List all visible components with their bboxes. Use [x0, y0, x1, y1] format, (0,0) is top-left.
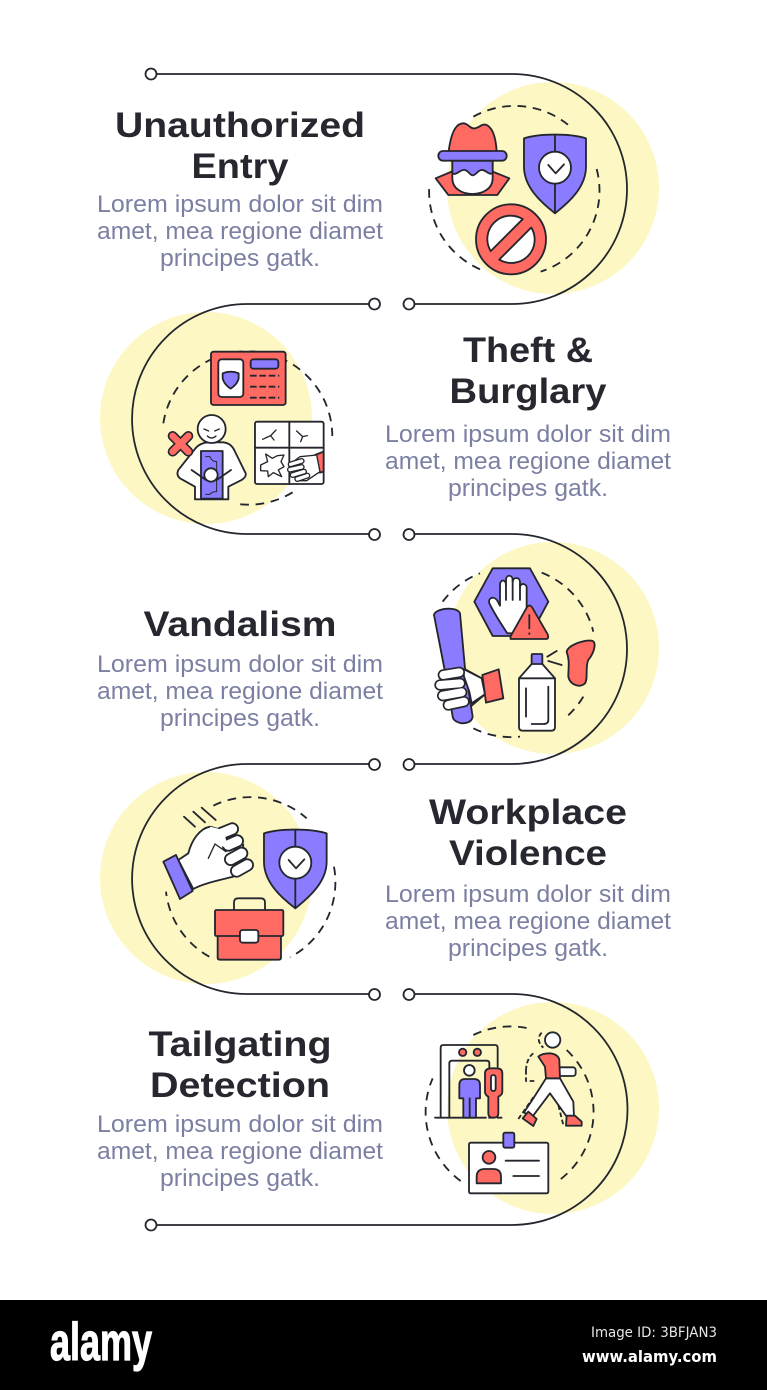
body text: amet, mea regione diamet	[385, 448, 671, 475]
heading: workplace violence: Violence	[449, 834, 607, 873]
alamy logo: alamy	[50, 1313, 152, 1372]
heading: theft and burglary: Theft &	[463, 331, 593, 370]
icon: spy, shield and prohibition sign	[429, 106, 599, 274]
body text	[97, 651, 383, 732]
icon: fist, shield and briefcase	[163, 797, 335, 960]
body text: amet, mea regione diamet	[97, 678, 383, 705]
body text	[385, 421, 671, 502]
panel: theft and burglary text	[385, 331, 671, 502]
panel: unauthorized entry text	[97, 106, 383, 272]
body text: Lorem ipsum dolor sit dim	[385, 421, 671, 448]
body text: Lorem ipsum dolor sit dim	[97, 651, 383, 678]
heading: vandalism: Vandalism	[144, 605, 336, 644]
panel: workplace violence text	[385, 793, 671, 962]
heading: unauthorized entry	[115, 106, 365, 186]
heading: tailgating detection	[148, 1025, 332, 1105]
body text: principes gatk.	[160, 1165, 320, 1192]
body text: principes gatk.	[160, 705, 320, 732]
icon: id card, thief with money and broken window	[163, 351, 332, 505]
heading: theft and burglary	[450, 331, 607, 411]
yellow background circles	[100, 82, 659, 1214]
heading: tailgating detection: Detection	[150, 1066, 330, 1105]
body text	[385, 881, 671, 962]
heading: theft and burglary: Burglary	[450, 372, 607, 411]
connector line with end dots	[132, 68, 627, 1230]
heading: workplace violence: Workplace	[429, 793, 627, 832]
image id: Image ID: 3BFJAN3	[591, 1325, 717, 1341]
footer bar	[0, 1300, 767, 1390]
body text: principes gatk.	[448, 475, 608, 502]
body text: amet, mea regione diamet	[97, 218, 383, 245]
website: www.alamy.com	[582, 1347, 717, 1366]
body text	[97, 1111, 383, 1192]
panel: tailgating detection text	[97, 1025, 383, 1192]
heading: unauthorized entry: Entry	[192, 147, 289, 186]
body text: Lorem ipsum dolor sit dim	[97, 191, 383, 218]
heading: workplace violence	[429, 793, 627, 873]
body text: Lorem ipsum dolor sit dim	[97, 1111, 383, 1138]
body text: amet, mea regione diamet	[385, 908, 671, 935]
icon: stop hand, bat and spray paint	[434, 568, 595, 737]
heading: tailgating detection: Tailgating	[148, 1025, 332, 1064]
body text: principes gatk.	[160, 245, 320, 272]
body text: principes gatk.	[448, 935, 608, 962]
body text: amet, mea regione diamet	[97, 1138, 383, 1165]
icon: metal detector, walking person and id badge	[426, 1026, 594, 1193]
body text: Lorem ipsum dolor sit dim	[385, 881, 671, 908]
heading: unauthorized entry: Unauthorized	[115, 106, 365, 145]
panel: vandalism text	[97, 605, 383, 732]
body text	[97, 191, 383, 272]
